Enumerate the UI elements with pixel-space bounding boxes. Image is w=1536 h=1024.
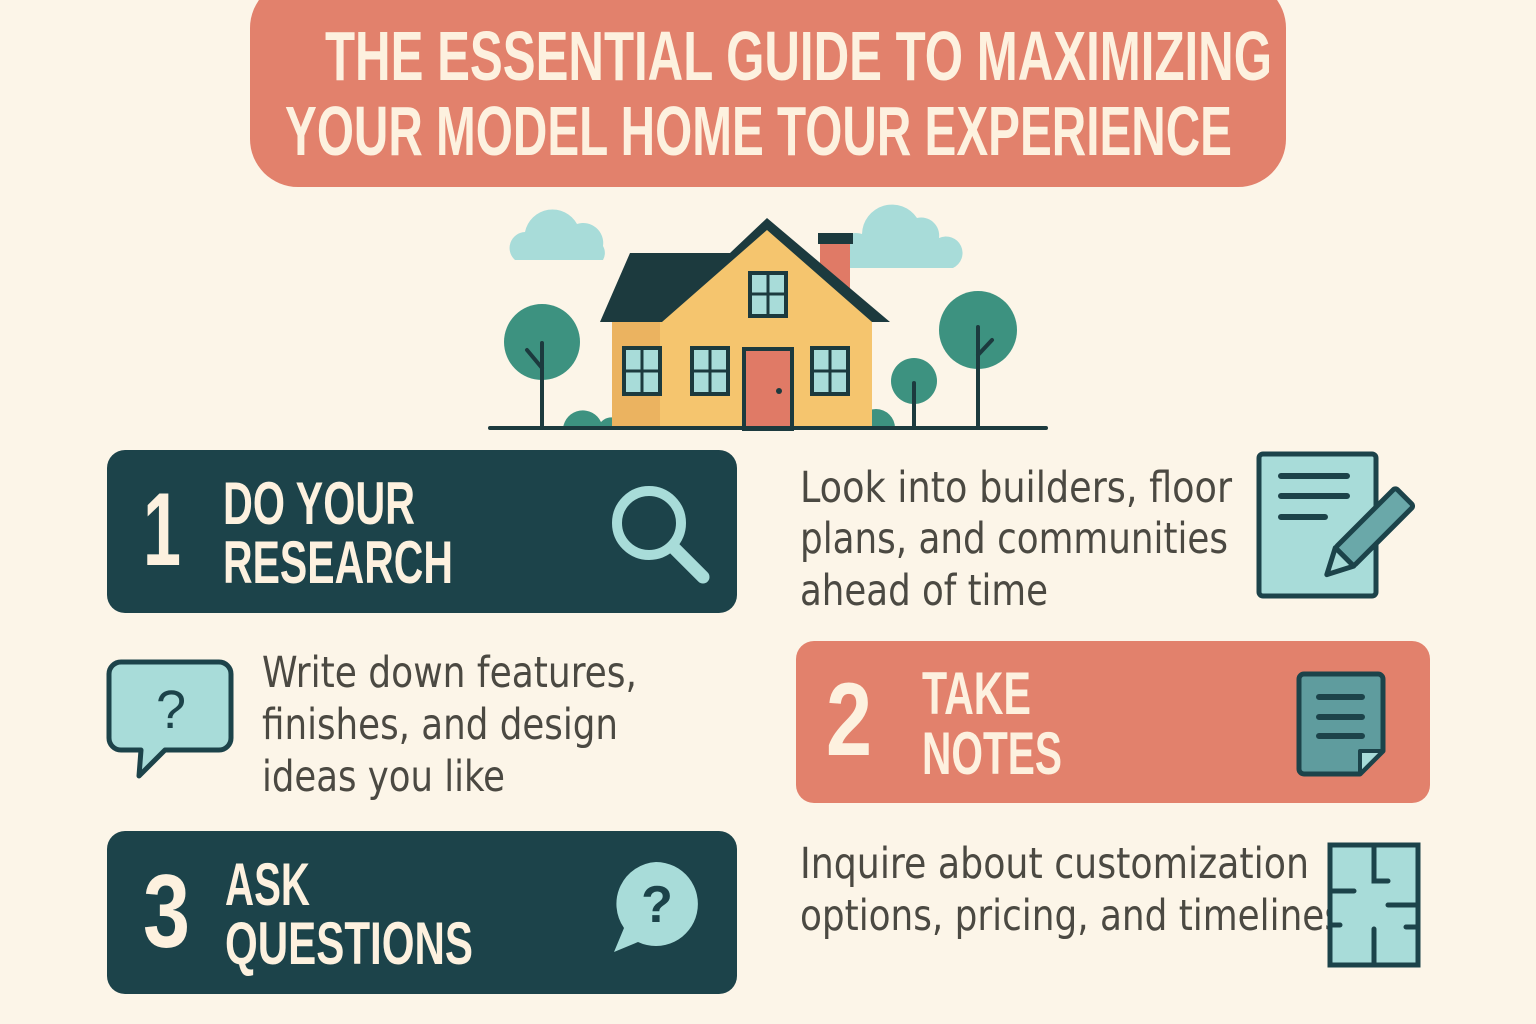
icon: question bubble: ?	[641, 876, 673, 934]
heading	[922, 660, 1062, 787]
heading: RESEARCH	[223, 529, 453, 596]
icon: speech bubble question	[106, 660, 234, 778]
number 2: 2	[826, 662, 872, 778]
text: research description: Look into builders, floor	[800, 463, 1232, 513]
text: notes description	[262, 648, 637, 800]
title	[285, 17, 1272, 170]
number 1: 1	[143, 472, 181, 588]
illustration: house scene	[488, 204, 1048, 431]
heading	[225, 851, 473, 977]
panel: step 2 take notes	[796, 641, 1430, 803]
text: research description: ahead of time	[800, 566, 1048, 615]
icon: magnifier	[612, 486, 710, 584]
icon: floor plan	[1328, 842, 1420, 968]
title banner	[250, 0, 1286, 187]
panel: step 3 ask questions	[107, 831, 737, 994]
text: questions description: Inquire about customization	[800, 839, 1309, 889]
heading: DO YOUR	[223, 470, 415, 537]
ground line	[490, 426, 1046, 430]
text: notes description: finishes, and design	[262, 700, 618, 750]
heading: QUESTIONS	[225, 910, 473, 977]
heading	[223, 470, 453, 596]
heading: NOTES	[922, 720, 1062, 787]
icon: speech bubble question: ?	[156, 680, 186, 740]
icon: clouds	[510, 205, 963, 268]
heading: ASK	[225, 851, 310, 918]
text: questions description	[800, 839, 1343, 941]
text: research description	[800, 463, 1232, 615]
number 3: 3	[143, 854, 190, 970]
icon: question bubble	[614, 862, 698, 952]
panel: step 1 do your research	[107, 450, 737, 613]
icon: house	[600, 218, 890, 429]
heading: TAKE	[922, 660, 1031, 727]
icon: trees and bushes	[504, 291, 1017, 428]
icon: notes page	[1296, 672, 1386, 776]
icon: document with pencil	[1256, 452, 1415, 598]
